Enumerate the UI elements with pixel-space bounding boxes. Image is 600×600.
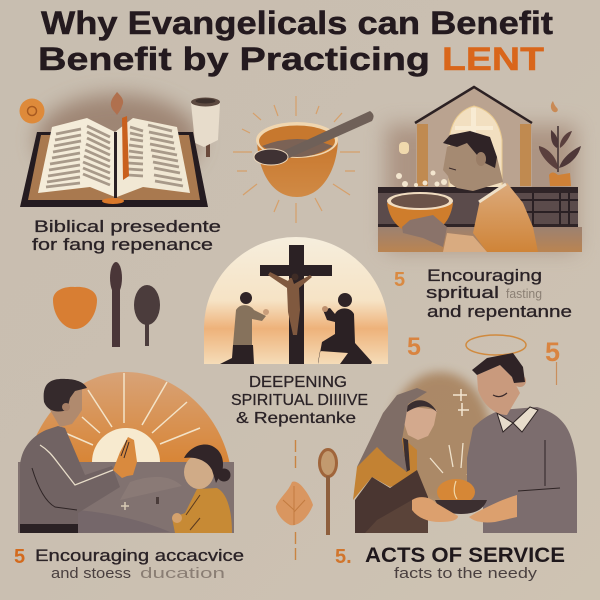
icon: orange medallion — [20, 98, 44, 124]
landscape — [18, 462, 234, 533]
text: deepening spiritual: DEEPENING — [249, 374, 347, 391]
text: encouraging spiritual fasting: spritual — [426, 283, 499, 302]
icon: peach fruit — [53, 287, 97, 329]
text: deepening spiritual — [231, 374, 368, 427]
icon: dark fork — [110, 262, 122, 347]
pew bench — [378, 187, 582, 252]
chapel building — [399, 87, 532, 190]
jesus figure — [268, 272, 312, 335]
brown halo — [388, 372, 492, 508]
bread in bowl — [435, 479, 487, 514]
cross — [260, 245, 332, 364]
bowl held — [387, 192, 453, 234]
text: acts of service: ACTS OF SERVICE — [365, 544, 565, 567]
brown halo behind bible — [36, 94, 200, 186]
panel: man with bowl in chapel — [378, 87, 582, 252]
text: encouraging spiritual fasting: Encouraging — [427, 266, 542, 285]
bible pages — [38, 116, 190, 204]
text: acts of service: facts to the needy — [394, 565, 538, 582]
text: encouraging acceptance — [14, 546, 244, 582]
text: biblical precedent: for fang repenance — [32, 235, 213, 254]
text: encouraging acceptance: ducation — [140, 565, 225, 582]
spoon — [254, 111, 374, 165]
man sweater — [443, 183, 538, 252]
text: encouraging acceptance: Encouraging accacvice — [35, 546, 244, 565]
icon: halo ring — [466, 335, 526, 355]
title: Why Evangelicals can Benefit — [41, 5, 553, 41]
text: encouraging spiritual fasting: fasting — [506, 286, 542, 301]
title: LENT — [442, 41, 545, 77]
panel: acts of service — [353, 335, 577, 533]
text: encouraging spiritual fasting — [394, 266, 572, 321]
child — [172, 444, 232, 533]
steam dots — [396, 170, 447, 187]
text: deepening spiritual: SPIRITUAL DIIIIVE — [231, 392, 368, 409]
text: deepening spiritual: & Repentanke — [236, 410, 356, 427]
sunrise — [36, 372, 230, 462]
panel: crucifix with kneeling figures — [204, 237, 388, 364]
kneeling figure right — [318, 293, 372, 364]
text: encouraging acceptance: 5 — [14, 546, 25, 568]
icon: small orange flame — [551, 101, 558, 112]
icon: coffee cup — [191, 98, 220, 157]
sun rays around bowl — [233, 96, 360, 223]
man head — [443, 131, 503, 191]
icon: orange number right with stem: 5 — [545, 337, 560, 367]
sparkles — [453, 389, 469, 416]
kneeling figure left — [220, 292, 269, 364]
title: Benefit by Practicing — [38, 41, 430, 77]
hands — [402, 215, 447, 247]
man in sweater — [467, 353, 577, 533]
icon: orange number right with stem — [545, 337, 560, 385]
praying hands — [113, 437, 137, 478]
chapel backdrop halo — [386, 125, 576, 250]
woman — [353, 388, 437, 533]
icon: dark spoon — [134, 285, 160, 346]
panel: bowl and spoon — [233, 96, 374, 223]
panel: man and child praying at sunrise — [18, 372, 234, 533]
icon: potted plant — [539, 126, 581, 186]
hands offering — [412, 495, 517, 522]
icon: orange number left: 5 — [407, 333, 421, 361]
icon: wooden spoon — [320, 450, 336, 535]
text: biblical precedent: Biblical presedente — [34, 217, 221, 236]
panel: open bible — [20, 92, 220, 207]
bible cover — [20, 132, 208, 207]
text: acts of service: 5. — [335, 546, 352, 568]
icon: small flame — [111, 92, 123, 115]
man in gray — [20, 379, 120, 533]
text: biblical precedent — [32, 217, 221, 254]
light rays from bread — [430, 443, 480, 475]
text: acts of service — [335, 544, 565, 582]
title — [38, 5, 553, 77]
text: encouraging spiritual fasting: and repentanne — [427, 302, 572, 321]
icon: orange number: 5 — [394, 269, 405, 291]
text: encouraging acceptance: and stoess — [51, 565, 131, 582]
icon: central leaf with stem — [276, 440, 313, 562]
